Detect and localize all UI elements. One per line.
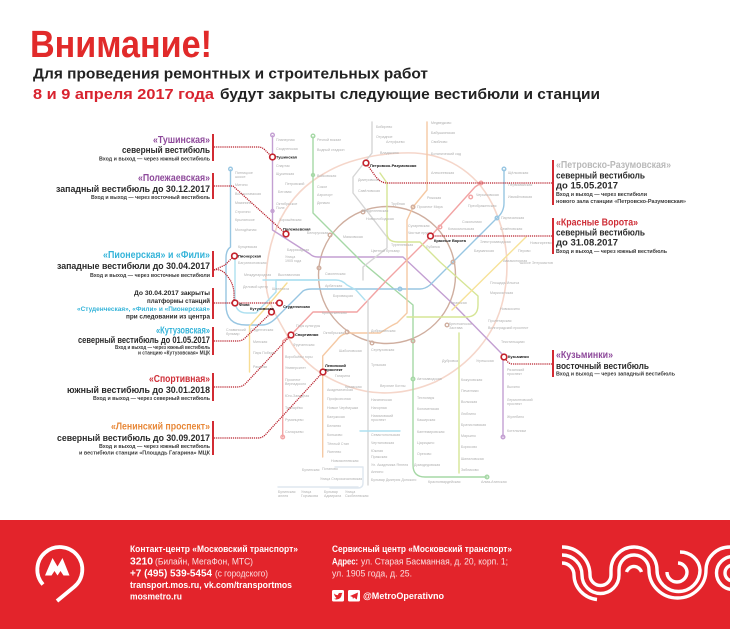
station labels: Борисово [461, 445, 477, 449]
station labels: Парк Победы [253, 351, 276, 355]
station labels: Каширская [417, 418, 435, 422]
callout: Тушинская: северный вестибюль [122, 145, 210, 156]
metro map [214, 121, 553, 498]
station labels: Бульвар [324, 490, 338, 494]
service centre text: ул. 1905 года, д. 25. [332, 568, 412, 578]
station labels: Маяковская [343, 235, 363, 239]
station labels: Новослободская [366, 217, 394, 221]
callout dotted lines [214, 147, 552, 438]
station labels: Сухаревская [408, 224, 429, 228]
closed station labels: Кутузовская [250, 306, 274, 311]
station labels: Черкизовская [476, 193, 499, 197]
contact centre text: Контакт-центр «Московский транспорт» [130, 544, 298, 554]
station labels: Трубная [391, 202, 405, 206]
callout: Кутузовская: и станцию «Кутузовская» МЦК [138, 350, 211, 356]
station labels: Петровский [285, 182, 304, 186]
callout: закрытые платформы: при следовании из центра [126, 314, 210, 320]
station labels: Щёлковская [508, 171, 528, 175]
station labels: Зябликово [461, 468, 479, 472]
station labels: Авиамоторная [503, 259, 527, 263]
subtitle [33, 66, 600, 103]
station labels: Улица [285, 255, 295, 259]
closed station labels: Ленинский [325, 363, 346, 368]
station labels: Щукинская [276, 172, 294, 176]
station labels: Кунцевская [238, 245, 257, 249]
callout: Красные Ворота [552, 218, 667, 255]
station labels: Царицыно [417, 441, 434, 445]
station labels: Волжская [461, 400, 477, 404]
contact centre text: transport.mos.ru, vk.com/transportmos [130, 580, 292, 590]
station labels: Отрадное [376, 135, 393, 139]
station labels: Кропоткинская [322, 311, 347, 315]
callout: Тушинская: Вход и выход — через южный вестибюль [99, 156, 210, 162]
station labels: Тропарёво [285, 406, 303, 410]
map lines [226, 122, 526, 488]
station labels: Баррикадная [287, 248, 309, 252]
station labels: Университет [285, 366, 306, 370]
callout: Пионерская и Фили: «Пионерская» и «Фили» [103, 250, 210, 261]
station labels: Октябрьская [323, 331, 344, 335]
station labels: Шоссе Энтузиастов [520, 261, 553, 265]
station labels: Южная [371, 449, 383, 453]
subtitle: 8 и 9 апреля 2017 года [33, 86, 215, 103]
closed station labels: Спортивная [295, 332, 318, 337]
station labels: Улица [345, 490, 355, 494]
callout: Тушинская [99, 134, 214, 162]
station labels: Площадь Ильича [490, 281, 519, 285]
station labels: Кантемировская [417, 430, 444, 434]
station labels: 1905 года [285, 259, 301, 263]
service centre text: ул. Старая Басманная, д. 20, корп. 1; [361, 556, 508, 566]
callout: Петровско-Разумовская: Вход и выход — через вестибюли [556, 191, 647, 198]
station labels: Медведково [431, 121, 451, 125]
station labels: Сходненская [276, 147, 298, 151]
station labels: аллея [278, 494, 288, 498]
contact centre text: (Билайн, МегаФон, МТС) [155, 556, 253, 566]
station labels: Поле [276, 206, 285, 210]
callout: Пионерская и Фили [57, 250, 214, 279]
callout: Ленинский проспект: и вестибюли станции «Площадь Гагарина» МЦК [79, 450, 211, 456]
station labels: Пролетарская [488, 319, 512, 323]
station labels: Угрешская [476, 359, 494, 363]
station labels: Проспект [285, 378, 301, 382]
callout: Пионерская и Фили: западные вестибюли до 30.04.2017 [57, 261, 210, 272]
station labels: Минская [253, 340, 267, 344]
station labels: Измайловская [508, 195, 532, 199]
closed station labels: Фили [239, 302, 250, 307]
station labels: Крылатское [235, 218, 255, 222]
footer panel [0, 520, 730, 629]
station labels: Серпуховская [371, 348, 394, 352]
station labels: Кожуховская [461, 378, 482, 382]
station labels: Алма-Атинская [481, 480, 507, 484]
station labels: Калужская [327, 415, 345, 419]
station labels: Текстильщики [501, 340, 525, 344]
station labels: Выставочная [278, 273, 300, 277]
station labels: Чертановская [371, 441, 394, 445]
station labels: Ясенево [327, 450, 341, 454]
station labels: Строгино [235, 210, 251, 214]
station labels: Митино [235, 183, 248, 187]
station labels: Мякинино [235, 201, 252, 205]
station labels: Цветной бульвар [371, 249, 400, 253]
callout: Ленинский проспект: Вход и выход — через южный вестибюль [99, 443, 210, 450]
callout: Петровско-Разумовская: до 15.05.2017 [556, 180, 618, 192]
callout: Спортивная [67, 373, 214, 402]
contact centre text: +7 (495) 539-5454 [130, 568, 212, 580]
station labels: Алексеевская [431, 171, 454, 175]
station labels: Деловой центр [243, 285, 268, 289]
station labels: Алтуфьево [386, 140, 405, 144]
station labels: Румянцево [285, 418, 303, 422]
callout: Тушинская: «Тушинская» [153, 135, 210, 146]
subtitle: будут закрыты следующие вестибюли и станции [220, 86, 600, 103]
callout: Полежаевская: «Полежаевская» [138, 173, 210, 184]
station labels: Профсоюзная [327, 397, 351, 401]
subtitle: Для проведения ремонтных и строительных работ [33, 66, 428, 82]
callout: Кутузовская: Вход и выход — через южный вестибюль [115, 344, 210, 351]
callout: Петровско-Разумовская [552, 160, 686, 205]
closed station labels: Студенческая [283, 304, 310, 309]
station labels: Арбатская [325, 284, 342, 288]
station labels: Международная [244, 273, 271, 277]
station labels: Молодёжная [235, 228, 256, 232]
callout: Красные Ворота: «Красные Ворота» [556, 218, 638, 228]
station labels: Первомайская [508, 183, 532, 187]
callout: Петровско-Разумовская: северный вестибюль [556, 170, 645, 182]
station labels: Лермонтовский [507, 398, 533, 402]
station labels: Потапово [322, 467, 338, 471]
station labels: Семёновская [500, 227, 522, 231]
station labels: Марксистская [490, 291, 513, 295]
station labels: Белорусская [307, 231, 328, 235]
station labels: Сокол [317, 185, 327, 189]
callout: закрытые платформы: До 30.04.2017 закрыты [134, 290, 210, 297]
station labels: бульвар [226, 332, 240, 336]
social handle: @MetroOperativno [363, 591, 445, 601]
station labels: Новоясеневская [331, 459, 359, 463]
station labels: Перово [518, 249, 530, 253]
callout: Кутузовская: северный вестибюль до 01.05.2017 [78, 335, 210, 346]
callout: Кутузовская: «Кутузовская» [156, 326, 210, 336]
station labels: Новогиреево [530, 241, 552, 245]
station labels: Люблино [461, 412, 476, 416]
station labels: Воробьёвы горы [285, 355, 313, 359]
station labels: Динамо [317, 201, 330, 205]
station labels: Комсомольская [448, 227, 474, 231]
station labels: Аннино [371, 470, 383, 474]
callout: Кутузовская [78, 326, 214, 356]
station labels: Беговая [278, 190, 291, 194]
callout: Полежаевская [56, 173, 214, 201]
station labels: проспект [507, 402, 522, 406]
station labels: Нахимовский [371, 414, 393, 418]
station labels: Раменки [253, 365, 267, 369]
callout: Ленинский проспект: «Ленинский проспект» [111, 422, 210, 432]
service centre text [332, 544, 512, 578]
station labels: Котельники [507, 429, 526, 433]
station labels: Багратионовская [238, 261, 267, 265]
station labels: Нагатинская [371, 398, 392, 402]
station labels: Рижская [427, 196, 441, 200]
callout: закрытые платформы: «Студенческая», «Фили» и «Пионерская» [77, 306, 210, 313]
station labels: Шаболовская [339, 349, 362, 353]
station labels: Дубровка [442, 359, 458, 363]
station labels: Улица Старокачаловская [320, 477, 362, 481]
callout: Ленинский проспект: северный вестибюль до 30.09.2017 [57, 433, 210, 444]
callout: Кузьминки: «Кузьминки» [556, 350, 613, 361]
station labels: Тургеневская [391, 243, 413, 247]
station labels: Коньково [327, 433, 342, 437]
station labels: Новые Черёмушки [327, 406, 358, 410]
station labels: Улица [301, 490, 311, 494]
station labels: Марьино [461, 434, 476, 438]
callout: Полежаевская: западный вестибюль до 30.12.2017 [56, 184, 210, 195]
callout: Кузьминки: Вход и выход — через западный вестибюль [556, 370, 675, 378]
callout: Красные Ворота: до 31.08.2017 [556, 238, 618, 248]
station labels: Сокольники [462, 220, 482, 224]
station labels: Савёловская [358, 189, 380, 193]
callout: Спортивная: Вход и выход — через северный вестибюль [93, 395, 210, 402]
station labels: Гагарина [335, 374, 350, 378]
station labels: Застава [449, 326, 462, 330]
station labels: Ботанический сад [431, 152, 462, 156]
station labels: Братиславская [461, 423, 486, 427]
contact centre text: (с городского) [215, 568, 268, 578]
station labels: Менделеевская [362, 209, 388, 213]
callout: Петровско-Разумовская: нового зала станции «Петровско-Разумовская» [556, 199, 686, 205]
callout: Кузьминки [552, 350, 675, 378]
closed station labels: Тушинская [276, 154, 297, 160]
station labels: Бунинская [278, 490, 295, 494]
station labels: Бунинская [302, 468, 319, 472]
station labels: Бабушкинская [431, 131, 455, 135]
station labels: Тёплый Стан [327, 442, 349, 446]
station labels: Печатники [461, 389, 478, 393]
station labels: Проспект Мира [417, 205, 443, 209]
callout: закрытые платформы [77, 288, 214, 320]
station labels: Академическая [327, 388, 353, 392]
callout: Петровско-Разумовская: «Петровско-Разумовская» [556, 160, 671, 171]
station labels: Аэропорт [317, 193, 333, 197]
station labels: Жулебино [507, 415, 524, 419]
closed station labels [238, 154, 529, 372]
station labels: Студенческая [250, 328, 273, 332]
station labels: Смоленская [325, 272, 346, 276]
station labels: Планерная [276, 138, 295, 142]
callout: Спортивная: «Спортивная» [149, 374, 210, 385]
callout: Красные Ворота: северный вестибюль [556, 228, 645, 238]
station labels: Славянский [226, 328, 246, 332]
station labels: Скобелевская [345, 494, 369, 498]
station labels: Шипиловская [461, 457, 484, 461]
station labels: Выхино [507, 385, 520, 389]
station labels: Автозаводская [417, 377, 442, 381]
station labels: Таганская [450, 301, 467, 305]
station labels: Речной вокзал [317, 138, 341, 142]
station labels: Ул. Академика Янгеля [371, 463, 408, 467]
station labels: Водный стадион [317, 148, 344, 152]
station labels: Бибирево [376, 125, 392, 129]
station labels: Бауманская [474, 249, 494, 253]
station labels: Новокосино [500, 307, 520, 311]
wave pattern [562, 547, 730, 600]
closed station labels: Кузьминки [508, 354, 529, 359]
station labels: Горчакова [301, 494, 318, 498]
station labels [226, 121, 553, 498]
station labels: Крестьянская [449, 322, 472, 326]
station labels: Вернадского [285, 382, 306, 386]
callout: Пионерская и Фили: Вход и выход — через восточные вестибюли [90, 272, 210, 279]
station labels: Дмитровская [358, 178, 380, 182]
station labels: Бульвар Дмитрия Донского [371, 478, 416, 482]
callout: Кузьминки: восточный вестибюль [556, 361, 649, 372]
station labels: Волгоградский проспект [488, 326, 529, 330]
station labels: Свиблово [431, 140, 447, 144]
closed station markers [232, 154, 507, 375]
service centre text: Сервисный центр «Московский транспорт» [332, 544, 512, 554]
station labels: Орехово [417, 452, 431, 456]
closed station labels: Полежаевская [283, 226, 311, 232]
station labels: Владыкино [380, 151, 399, 155]
station labels: Боровицкая [333, 294, 353, 298]
station labels: Лубянка [426, 245, 440, 249]
title: Внимание! [30, 24, 212, 66]
station labels: Фрунзенская [293, 343, 315, 347]
station labels: Электрозаводская [480, 240, 511, 244]
callout: Ленинский проспект [57, 421, 214, 456]
station labels: Севастопольская [371, 433, 400, 437]
station labels: Шелепиха [272, 287, 289, 291]
station labels: Октябрьское [276, 202, 297, 206]
station labels: Красногвардейская [428, 480, 461, 484]
station labels: Технопарк [417, 396, 435, 400]
station labels: Волоколамская [235, 192, 261, 196]
station labels: Юго-Западная [285, 394, 309, 398]
station labels: Пятницкое [235, 171, 253, 175]
station labels: Рязанский [507, 368, 524, 372]
station labels: Верхние Котлы [380, 384, 406, 388]
station labels: Крымская [345, 385, 362, 389]
icon: telegram [348, 590, 360, 602]
station labels: Чистые пруды [408, 231, 432, 235]
station labels: Коломенская [417, 407, 439, 411]
callout: Спортивная: южный вестибюль до 30.01.2018 [67, 385, 210, 396]
station labels: Беляево [327, 424, 341, 428]
icon: twitter [332, 590, 344, 602]
station labels: Войковская [317, 174, 336, 178]
station labels: Саларьево [285, 430, 303, 434]
contact centre text [130, 544, 298, 602]
station labels: шоссе [235, 175, 245, 179]
service centre text: Адрес: [332, 556, 358, 566]
callout: Полежаевская: Вход и выход — через восточный вестибюль [91, 194, 210, 201]
closed station labels: Петровско-Разумовская [370, 163, 416, 168]
station labels: Парк культуры [296, 324, 321, 328]
station labels: Преображенская [468, 204, 496, 208]
station labels: Партизанская [501, 216, 524, 220]
station labels: Нагорная [371, 406, 387, 410]
station labels: Тульская [371, 363, 386, 367]
station labels: Хорошёвская [279, 218, 302, 222]
station labels: Спартак [276, 164, 290, 168]
station labels: проспект [507, 372, 522, 376]
closed station labels: проспект [325, 367, 343, 372]
contact centre text: 3210 [130, 556, 153, 568]
station labels: Добрынинская [371, 329, 396, 333]
contact centre text: mosmetro.ru [130, 592, 182, 602]
station labels: проспект [371, 418, 386, 422]
closed station labels: Пионерская [238, 254, 261, 258]
station labels: Домодедовская [414, 463, 440, 467]
icon: metro logo [37, 547, 82, 601]
closed station labels: Красные Ворота [434, 238, 467, 243]
station labels: Адмирала [324, 494, 341, 498]
callout: Красные Ворота: Вход и выход — через южный вестибюль [556, 248, 667, 255]
station labels: Пражская [371, 455, 387, 459]
callout: закрытые платформы: платформы станций [147, 297, 210, 305]
